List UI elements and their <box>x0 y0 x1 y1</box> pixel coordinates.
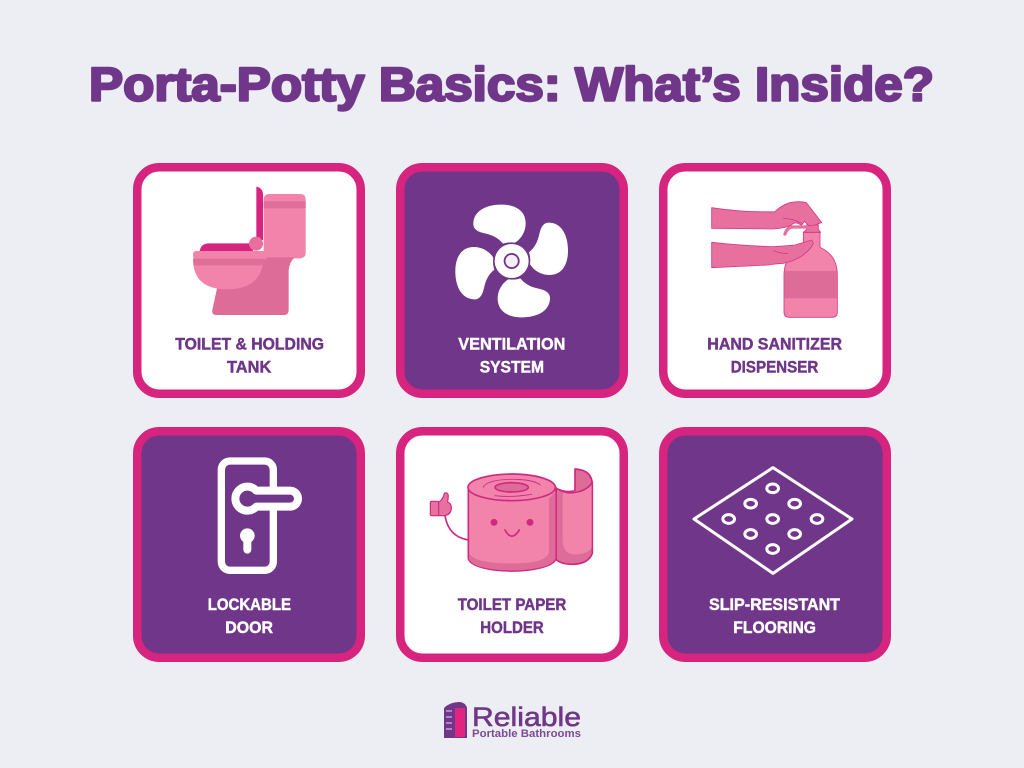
label: toilet paper holder: HOLDER <box>480 619 544 637</box>
logo <box>444 702 581 740</box>
label: toilet and holding tank <box>175 336 324 376</box>
label: toilet and holding tank: TOILET & HOLDING <box>175 336 324 354</box>
label: hand sanitizer dispenser: HAND SANITIZER <box>707 336 842 354</box>
panel: lockable door <box>137 431 361 658</box>
label: toilet paper holder: TOILET PAPER <box>458 596 566 614</box>
label: hand sanitizer dispenser: DISPENSER <box>731 358 818 376</box>
label: slip-resistant flooring: FLOORING <box>733 619 816 637</box>
label: ventilation system: SYSTEM <box>480 358 544 376</box>
card frame <box>663 431 887 658</box>
card frame <box>663 167 887 394</box>
card frame <box>400 167 624 394</box>
icon: hands and sanitizer bottle <box>712 202 837 317</box>
icon: toilet <box>193 187 306 315</box>
title: Porta-Potty Basics: What’s Inside? <box>89 58 934 110</box>
icon: portable toilet <box>444 702 467 738</box>
label: lockable door <box>208 596 291 637</box>
icon: fan <box>455 205 568 317</box>
icon: textured floor tile <box>694 468 852 573</box>
panel: ventilation system <box>400 167 624 394</box>
panel: toilet paper holder <box>400 431 624 658</box>
label: slip-resistant flooring <box>709 596 840 637</box>
label: toilet and holding tank: TANK <box>227 358 271 376</box>
logo tagline: Portable Bathrooms <box>472 728 581 740</box>
label: ventilation system: VENTILATION <box>458 336 565 354</box>
label: hand sanitizer dispenser <box>707 336 842 376</box>
card frame <box>137 167 361 394</box>
panel: slip-resistant flooring <box>663 431 887 658</box>
label: ventilation system <box>458 336 565 376</box>
label: slip-resistant flooring: SLIP-RESISTANT <box>709 596 840 614</box>
panel: hand sanitizer dispenser <box>663 167 887 394</box>
icon: door handle <box>221 461 298 570</box>
logo wordmark: Reliable <box>472 702 581 732</box>
card frame <box>137 431 361 658</box>
panel: toilet and holding tank <box>137 167 361 394</box>
label: lockable door: DOOR <box>225 619 273 637</box>
icon: toilet paper roll character <box>430 469 592 571</box>
card frame <box>400 431 624 658</box>
label: lockable door: LOCKABLE <box>208 596 291 614</box>
label: toilet paper holder <box>458 596 566 637</box>
